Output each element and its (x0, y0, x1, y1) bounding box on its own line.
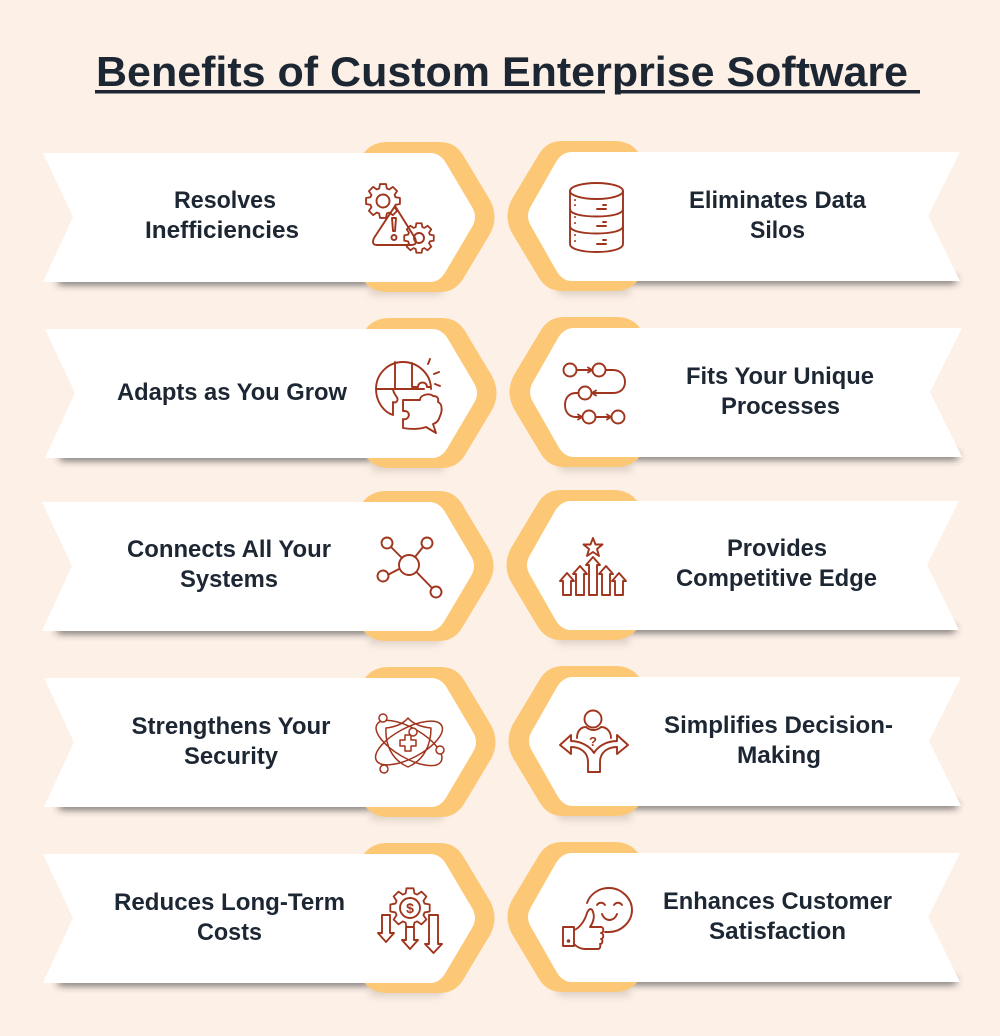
text: Eliminates Data Silos: Eliminates Data (689, 187, 867, 214)
text: Eliminates Data Silos (689, 187, 867, 244)
text: Reduces Long-Term Costs: Reduces Long-Term (114, 889, 345, 916)
panel: Eliminates Data Silos (508, 141, 960, 295)
icon: network hub (378, 538, 442, 598)
panel: Simplifies Decision-Making (508, 666, 961, 820)
text: Adapts as You Grow: Adapts as You Grow (117, 379, 347, 406)
icon: gear with dollar and down arrows: $ (406, 900, 414, 916)
text: Fits Your Unique Processes (686, 363, 874, 420)
panel: Resolves Inefficiencies (43, 142, 494, 295)
panel: Provides Competitive Edge (506, 490, 959, 644)
text: Enhances Customer Satisfaction (663, 888, 892, 945)
text: Connects All Your Systems: Connects All Your (127, 536, 331, 563)
text: Provides Competitive Edge: Competitive Edge (676, 565, 877, 592)
text: Strengthens Your Security: Security (184, 743, 279, 770)
icon: gear with dollar and down arrows (378, 888, 442, 953)
text: Connects All Your Systems: Systems (180, 566, 278, 593)
text: Provides Competitive Edge: Provides (727, 535, 827, 562)
text: Connects All Your Systems (127, 536, 331, 593)
panel: Strengthens Your Security (44, 667, 496, 820)
text: Simplifies Decision-Making: Making (737, 742, 821, 769)
icon: globe puzzle (376, 359, 442, 433)
text: Enhances Customer Satisfaction: Enhances Customer (663, 888, 892, 915)
icon: thumbs up and smile (563, 888, 632, 949)
icon: gears with warning triangle (366, 184, 434, 253)
text: Strengthens Your Security: Strengthens Your (132, 713, 330, 740)
text: Eliminates Data Silos: Silos (750, 217, 805, 244)
text: Enhances Customer Satisfaction: Satisfaction (709, 918, 846, 945)
text: Strengthens Your Security (132, 713, 330, 770)
text: Reduces Long-Term Costs (114, 889, 345, 946)
text: Resolves Inefficiencies (145, 187, 299, 244)
panel: Enhances Customer Satisfaction (508, 842, 960, 996)
icon: database (570, 183, 623, 252)
icon: person at crossroads (560, 710, 628, 772)
text: Provides Competitive Edge (676, 535, 877, 592)
text: Fits Your Unique Processes: Processes (721, 393, 840, 420)
text: Reduces Long-Term Costs: Costs (197, 919, 262, 946)
icon: shield and atom (369, 712, 449, 774)
text: Simplifies Decision-Making: Simplifies Decision- (664, 712, 893, 739)
panel: Fits Your Unique Processes (510, 317, 962, 471)
icon: star and rising arrows (560, 538, 626, 595)
panel: Adapts as You Grow (45, 318, 496, 471)
icon: process flow (564, 364, 625, 424)
text: Simplifies Decision-Making (664, 712, 893, 769)
text: Resolves Inefficiencies: Inefficiencies (145, 217, 299, 244)
title: Benefits of Custom Enterprise Software (96, 48, 908, 95)
panel: Connects All Your Systems (42, 491, 494, 644)
panel: Reduces Long-Term Costs (43, 843, 494, 996)
text: Resolves Inefficiencies: Resolves (174, 187, 276, 214)
icon: person at crossroads: ? (589, 734, 597, 749)
text: Fits Your Unique Processes: Fits Your Unique (686, 363, 874, 390)
